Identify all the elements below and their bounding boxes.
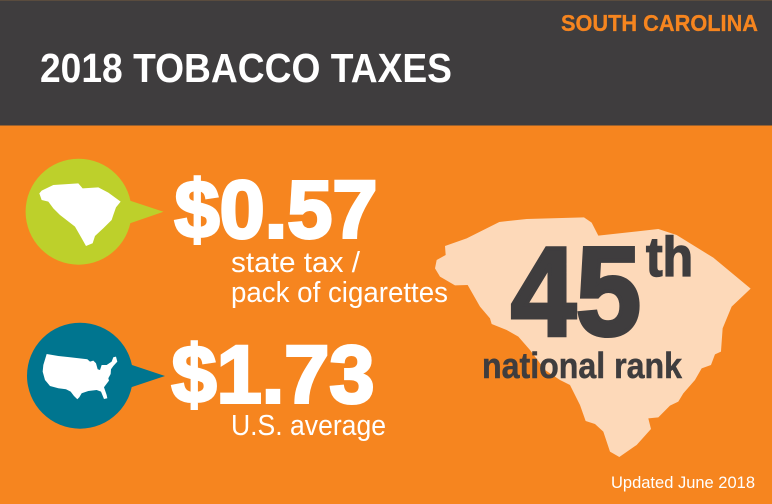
state tax amount: $0.57	[174, 164, 378, 256]
icon: South Carolina in green speech bubble	[26, 159, 163, 265]
U.S. average label: U.S. average	[231, 410, 386, 442]
icon: United States in teal speech bubble	[27, 323, 165, 429]
rank ordinal suffix: th	[646, 225, 693, 288]
state tax label: state tax /	[231, 247, 361, 279]
state tax label	[231, 247, 448, 309]
title: 2018 TOBACCO TAXES	[40, 45, 452, 91]
map: South Carolina	[435, 217, 751, 457]
state tax label: pack of cigarettes	[231, 277, 448, 309]
U.S. average amount: $1.73	[172, 330, 374, 420]
rank label: national rank	[482, 345, 683, 386]
update note: Updated June 2018	[611, 473, 755, 492]
header band	[0, 0, 772, 126]
rank number: 45	[511, 221, 641, 362]
South Carolina map with rank	[435, 217, 751, 457]
state name: SOUTH CAROLINA	[561, 10, 758, 36]
